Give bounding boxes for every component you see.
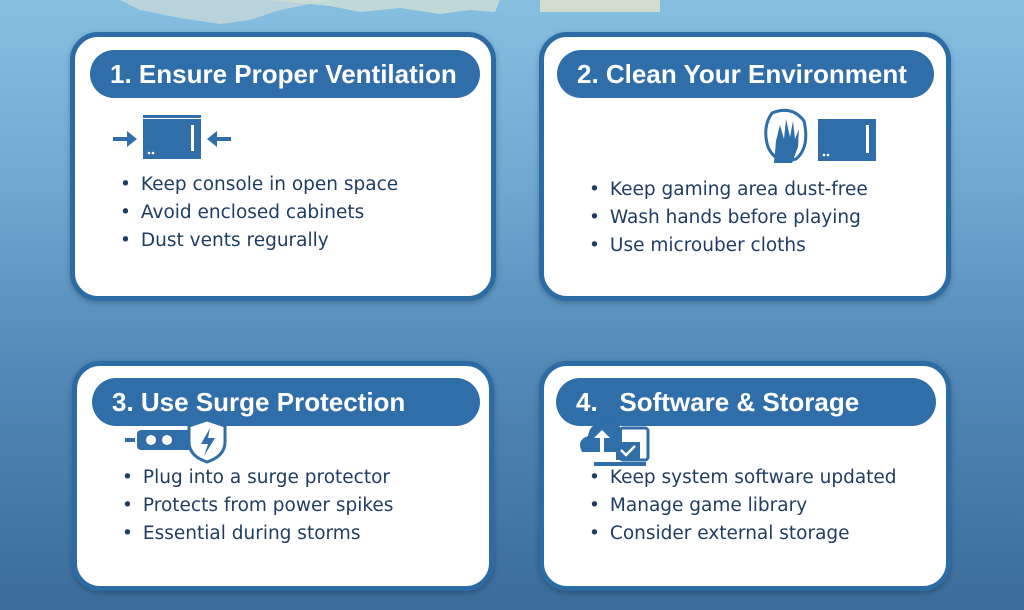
list 2: Keep gaming area dust-free <box>610 179 868 200</box>
list 3: Plug into a surge protector <box>143 467 390 488</box>
list 3: Essential during storms <box>143 523 360 544</box>
list 1: Keep console in open space <box>141 174 398 195</box>
list 2: Wash hands before playing <box>610 207 861 228</box>
list 4: Keep system software updated <box>610 467 897 488</box>
list 3 <box>124 467 393 544</box>
list 4: Manage game library <box>610 495 807 516</box>
list 1: Dust vents regurally <box>141 230 329 251</box>
list 1 <box>122 174 398 251</box>
heading 4: 4. Software & Storage <box>576 387 859 417</box>
list 2 <box>592 179 868 256</box>
heading 2: 2. Clean Your Environment <box>577 59 907 89</box>
card 1: ventilation <box>70 32 496 301</box>
heading 2 <box>557 50 934 98</box>
heading 3: 3. Use Surge Protection <box>112 387 405 417</box>
background skyline <box>120 0 660 24</box>
list 4 <box>592 467 897 544</box>
heading 1 <box>90 50 480 98</box>
card 2: clean <box>539 32 951 301</box>
heading 3 <box>92 378 480 426</box>
icon: cloud upload with device <box>580 426 650 466</box>
icon: hand cleaning console <box>764 108 876 163</box>
list 4: Consider external storage <box>610 523 850 544</box>
list 1: Avoid enclosed cabinets <box>141 202 364 223</box>
list 2: Use microuber cloths <box>610 235 806 256</box>
icon: console with arrows <box>113 115 231 159</box>
heading 4 <box>556 378 936 426</box>
card 4: software <box>539 361 951 591</box>
list 3: Protects from power spikes <box>143 495 393 516</box>
heading 1: 1. Ensure Proper Ventilation <box>110 59 457 89</box>
icon: surge protector with shield <box>125 422 226 464</box>
card 3: surge <box>72 361 494 591</box>
